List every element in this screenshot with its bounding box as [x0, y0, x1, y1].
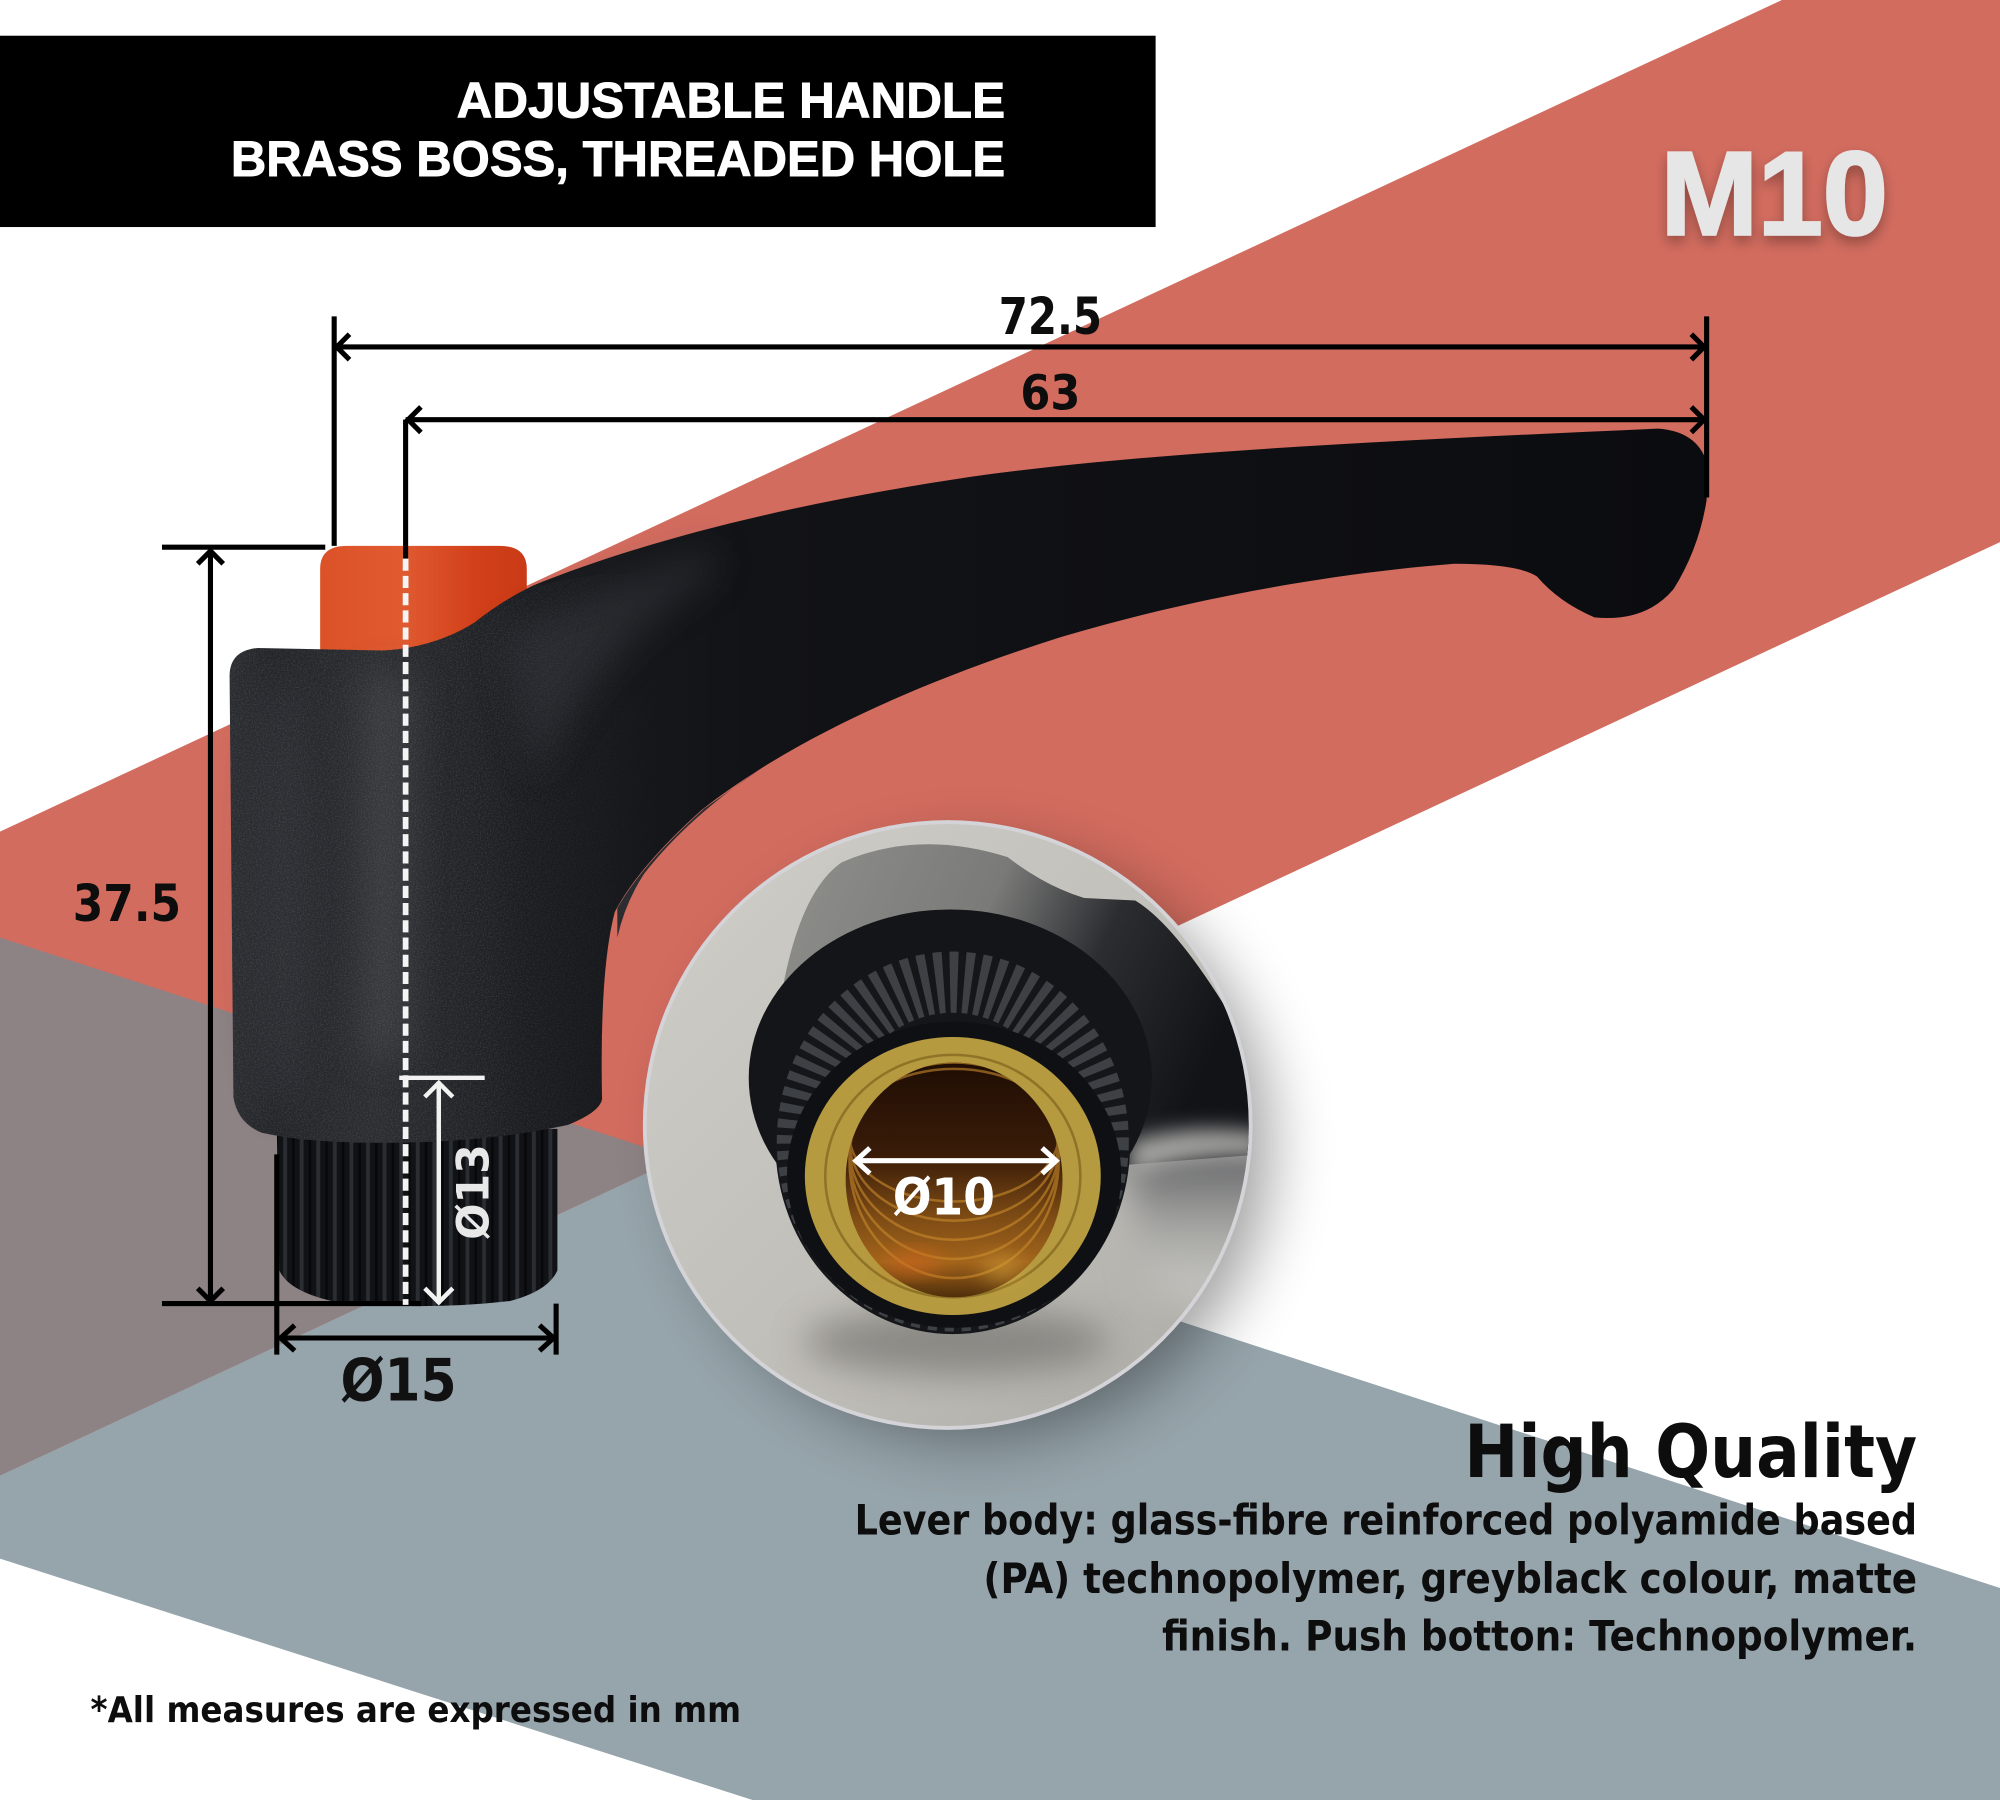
dimension Ø10: Ø10 — [893, 1168, 995, 1227]
contact shadow — [804, 1309, 1110, 1375]
knurled collar — [277, 1129, 557, 1306]
size label M10: M10 — [1661, 129, 1888, 261]
title banner: ADJUSTABLE HANDLE — [457, 72, 1005, 128]
dimension 63 — [406, 365, 1704, 559]
dimension 37.5: 37.5 — [73, 875, 181, 934]
lower right bright area — [1120, 1140, 1248, 1303]
description text: finish. Push botton: Technopolymer. — [1162, 1612, 1917, 1661]
title banner — [0, 36, 1156, 227]
photo rim — [643, 820, 1253, 1430]
brass ring — [805, 1037, 1101, 1315]
black base disc — [749, 909, 1152, 1246]
dimension Ø13: Ø13 — [448, 1144, 500, 1240]
title banner: BRASS BOSS, THREADED HOLE — [231, 131, 1005, 187]
shadow — [682, 852, 1269, 1439]
black ring — [787, 1022, 1121, 1328]
dimension Ø13 — [399, 1078, 500, 1304]
lever end in the background — [779, 844, 1263, 1167]
dimension 37.5 — [73, 547, 421, 1304]
background: blue-grey diagonal band — [0, 1158, 2000, 1800]
background: grey diagonal band — [0, 938, 679, 1476]
threaded bore — [846, 1043, 1062, 1297]
lever highlights — [253, 548, 714, 1110]
dimension 63: 63 — [1020, 365, 1080, 421]
dimension 72.5 — [334, 288, 1707, 546]
dimension 72.5: 72.5 — [999, 288, 1102, 347]
product photo: adjustable handle — [230, 429, 1707, 1306]
footnote: *All measures are expressed in mm — [91, 1690, 741, 1731]
dimension Ø15: Ø15 — [341, 1347, 457, 1415]
push button — [320, 546, 527, 663]
dimension Ø10 — [856, 1148, 1056, 1227]
lever body — [230, 429, 1707, 1143]
gloss streak — [1129, 1129, 1263, 1180]
heading: High Quality: High Quality — [1464, 1411, 1917, 1495]
circular detail photo: brass threaded hole — [638, 816, 1288, 1441]
lever matte texture — [230, 575, 603, 1143]
centre line — [403, 559, 408, 1305]
knurled ring — [776, 954, 1130, 1334]
description text — [855, 1495, 1917, 1661]
lever underside gloss — [617, 765, 765, 938]
dimension Ø15 — [277, 1154, 556, 1415]
